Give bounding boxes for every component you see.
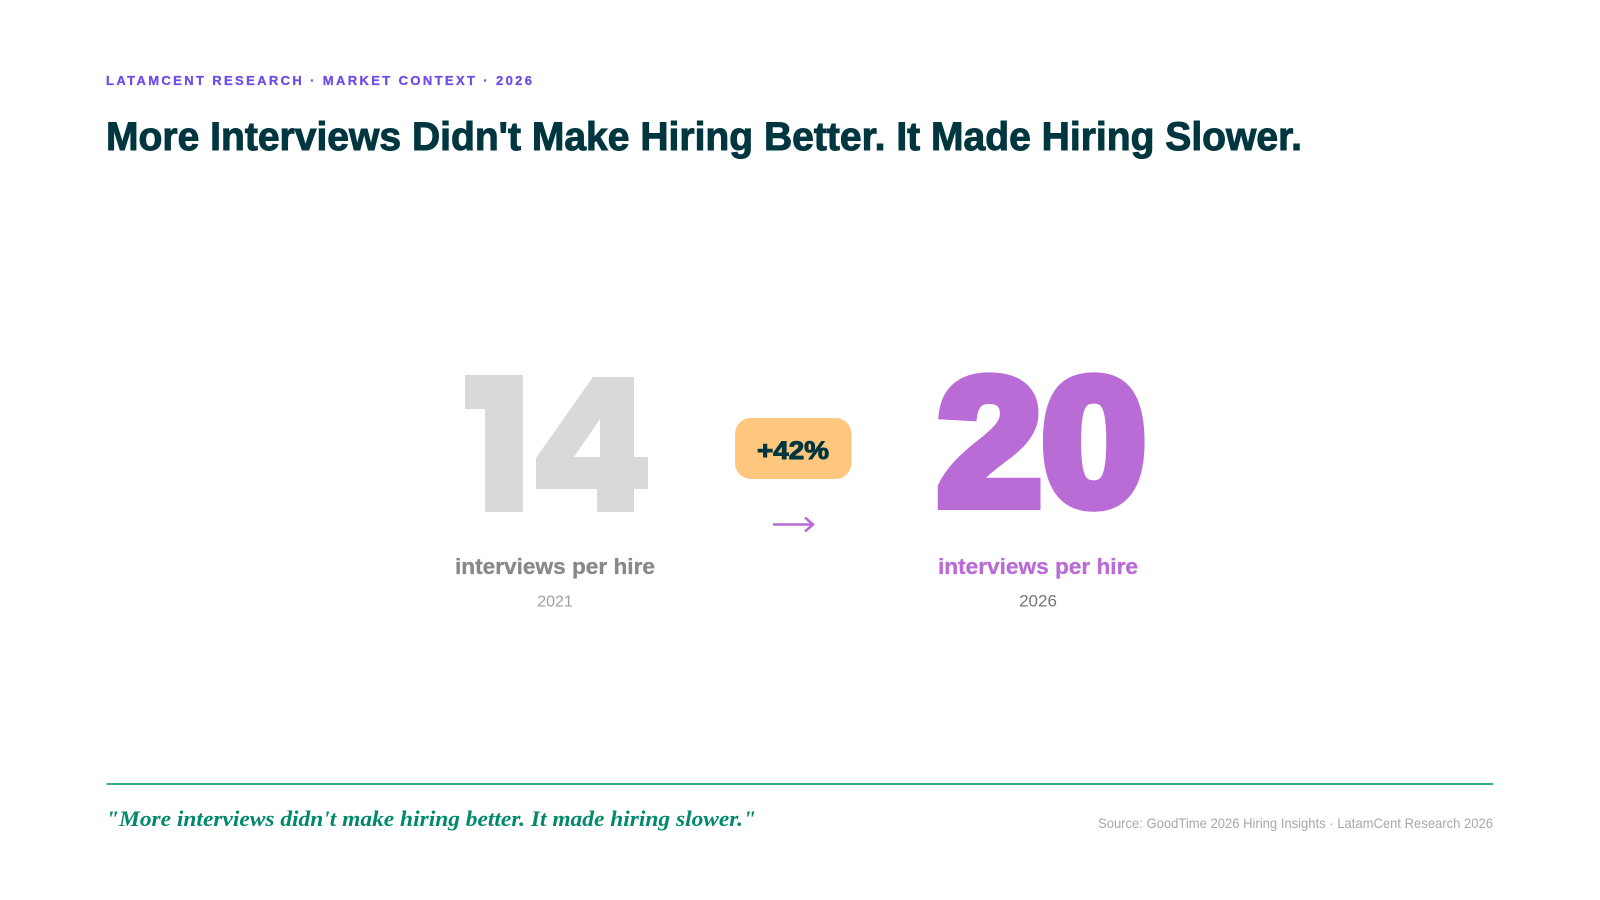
number 14: 1 <box>432 296 577 586</box>
title: More Interviews Didn't Make Hiring Better. It Made Hiring Slower. <box>106 115 1302 159</box>
footer rule <box>106 783 1493 785</box>
change badge <box>735 418 852 479</box>
number 14 <box>465 375 648 512</box>
eyebrow: LATAMCENT RESEARCH · MARKET CONTEXT · 2026 <box>106 73 532 88</box>
label 2021: interviews per hire <box>455 554 655 579</box>
source: Source: GoodTime 2026 Hiring Insights · LatamCent Research 2026 <box>1098 815 1493 831</box>
label 2026: interviews per hire <box>938 554 1138 579</box>
year 2026: 2026 <box>1019 592 1057 610</box>
pill <box>735 418 852 479</box>
number 14: 4 <box>530 317 658 574</box>
year 2021: 2021 <box>537 594 573 610</box>
number 20: 20 <box>938 342 1146 543</box>
quote: "More interviews didn't make hiring better. It made hiring slower." <box>106 806 756 831</box>
percent: +42% <box>757 437 829 465</box>
infographic canvas <box>106 76 1493 831</box>
stat: 2026 <box>938 342 1146 610</box>
arrow <box>773 518 813 532</box>
stat: 2021 <box>456 375 654 606</box>
